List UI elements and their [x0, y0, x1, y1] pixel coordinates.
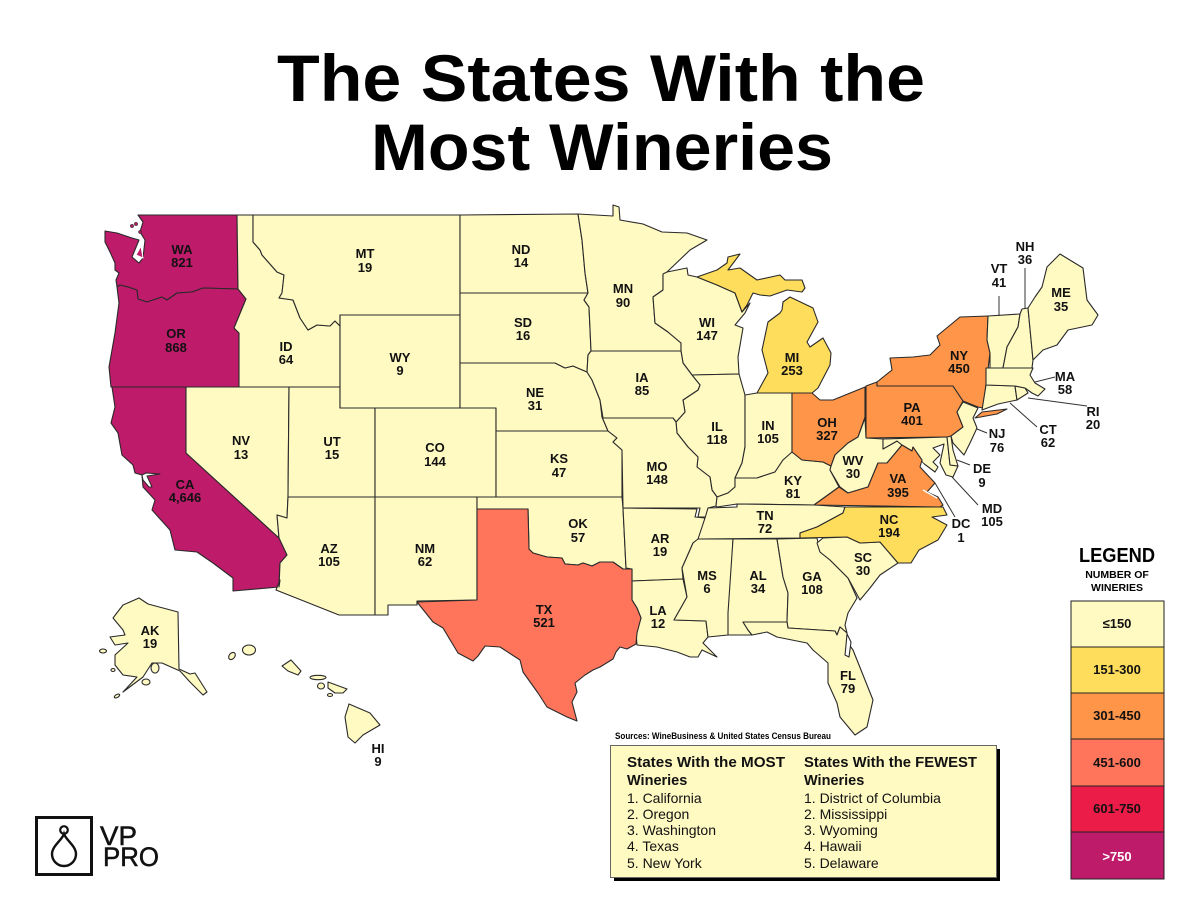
label: OR: OR: [166, 326, 186, 341]
legend scale: 451-600: [1093, 755, 1141, 770]
label: IA: 85: [635, 383, 649, 398]
label: OK: 57: [571, 530, 585, 545]
label: KY: 81: [786, 486, 800, 501]
state: New Hampshire: [1003, 308, 1033, 368]
label: ME: ME: [1051, 285, 1071, 300]
state: Iowa: [587, 351, 700, 422]
state: Minnesota: [578, 205, 707, 351]
state: Ohio: [792, 387, 865, 466]
label: NH: NH: [1016, 239, 1034, 254]
label: MD: 105: [981, 514, 1003, 529]
label: TN: 72: [758, 521, 772, 536]
label: PA: PA: [903, 400, 921, 415]
label: ME: 35: [1054, 299, 1068, 314]
label: AK: AK: [141, 623, 159, 638]
state: Nebraska: [460, 363, 608, 431]
legend scale: [1071, 601, 1164, 879]
label: AL: AL: [749, 568, 767, 583]
label: AK: 19: [143, 636, 157, 651]
column: fewest wineries: 4. Hawaii: [804, 838, 862, 854]
label: CA: 4,646: [169, 490, 201, 505]
label: MT: 19: [358, 260, 372, 275]
state: Alaska: [110, 598, 207, 695]
state: Montana: [253, 215, 460, 330]
column: most wineries: 3. Washington: [627, 822, 716, 838]
label: MI: MI: [785, 350, 799, 365]
leader lines for small states: [935, 268, 1087, 517]
column: most wineries: States With the MOST: [627, 755, 785, 771]
state: Utah: [288, 387, 375, 497]
label: MO: 148: [646, 472, 668, 487]
label: VA: VA: [889, 471, 907, 486]
label: NJ: 76: [990, 440, 1004, 455]
label: DE: DE: [973, 461, 991, 476]
rankings panel: [610, 746, 1000, 881]
state: Vermont: [987, 314, 1020, 368]
label: HI: 9: [374, 754, 382, 769]
label: IN: 105: [757, 431, 779, 446]
state: Washington, Puget Sound peninsula: [136, 246, 143, 258]
label: AR: AR: [651, 531, 669, 546]
state: Alaska islands: [100, 649, 159, 699]
state: Wisconsin: [653, 268, 750, 375]
label: KS: 47: [552, 465, 566, 480]
sources note: Sources: WineBusiness & United States Census Bureau: [615, 731, 831, 741]
state: South Dakota: [460, 293, 591, 372]
label: WV: WV: [843, 453, 863, 468]
title: [277, 41, 925, 184]
logo wordmark: VP: [100, 821, 137, 851]
label: OH: 327: [816, 428, 838, 443]
label: FL: 79: [841, 681, 855, 696]
logo: VP PRO: [36, 818, 159, 874]
legend subheading: WINERIES: [1091, 582, 1143, 594]
state: Hawaii: [227, 645, 380, 743]
column: most wineries: Wineries: [627, 773, 687, 789]
label: MS: MS: [697, 568, 717, 583]
state value labels: [141, 239, 1100, 769]
column: fewest wineries: [804, 755, 977, 871]
label: WI: WI: [699, 315, 715, 330]
legend scale: 601-750: [1093, 801, 1141, 816]
label: CT: CT: [1039, 422, 1057, 437]
label: SC: SC: [854, 550, 872, 565]
panel shadow: [614, 749, 1000, 881]
state: Michigan upper peninsula: [697, 254, 805, 312]
state: Florida: [743, 622, 873, 735]
label: MO: MO: [647, 459, 667, 474]
state: Indiana: [735, 393, 792, 478]
label: NY: NY: [950, 348, 968, 363]
state: Kentucky: [716, 452, 839, 507]
column: most wineries: 4. Texas: [627, 838, 679, 854]
label: SC: 30: [856, 563, 870, 578]
label: SD: 16: [516, 328, 530, 343]
label: ND: ND: [512, 242, 530, 257]
column: most wineries: 2. Oregon: [627, 806, 689, 822]
label: AZ: 105: [318, 554, 340, 569]
state: Delaware: [947, 436, 958, 466]
label: PA: 401: [901, 413, 923, 428]
label: FL: FL: [840, 668, 856, 683]
state: Michigan lower peninsula: [757, 297, 831, 393]
legend subheading: NUMBER OF: [1085, 569, 1149, 581]
state: Arkansas: [623, 508, 705, 581]
label: NV: NV: [232, 433, 250, 448]
label: WY: 9: [396, 363, 404, 378]
label: NC: NC: [880, 512, 898, 527]
label: UT: 15: [325, 447, 339, 462]
feature: Virginia tidal inlets: [922, 463, 937, 498]
label: WA: WA: [172, 242, 192, 257]
label: LA: 12: [651, 616, 665, 631]
state: Illinois: [676, 374, 745, 497]
column: most wineries: 5. New York: [627, 855, 703, 871]
state: North Carolina: [800, 507, 947, 563]
label: KY: KY: [784, 473, 802, 488]
state: Wyoming: [340, 315, 460, 408]
state: Nevada: [186, 387, 289, 538]
state: Tennessee: [698, 504, 845, 539]
title: The States With the: [277, 41, 925, 115]
label: WY: WY: [390, 350, 410, 365]
state: Missouri: [602, 417, 717, 517]
label: MA: 58: [1058, 382, 1072, 397]
label: TX: TX: [536, 602, 552, 617]
label: IA: IA: [636, 370, 648, 385]
column: fewest wineries: 1. District of Columbia: [804, 790, 941, 806]
legend scale: >750: [1102, 849, 1132, 864]
state: New York, Long Island: [975, 409, 1007, 418]
state: Colorado: [375, 408, 496, 497]
state: Georgia: [777, 538, 857, 635]
label: NE: 31: [528, 398, 542, 413]
column: most wineries: 1. California: [627, 790, 702, 806]
state: Alabama: [728, 539, 788, 635]
label: VT: 41: [992, 275, 1006, 290]
state: North Dakota: [460, 214, 588, 293]
label: CO: 144: [424, 454, 447, 469]
state: West Virginia: [830, 418, 902, 493]
label: NV: 13: [234, 447, 248, 462]
state: Oregon: [109, 285, 246, 387]
state: Kansas: [496, 431, 622, 497]
state: Pennsylvania: [866, 382, 963, 438]
logo mark: [36, 818, 92, 874]
label: CT: 62: [1041, 435, 1055, 450]
feature: St. Johns river in Florida: [845, 634, 851, 657]
label: WA: 821: [171, 255, 193, 270]
label: GA: GA: [802, 569, 822, 584]
legend heading: LEGEND: [1079, 545, 1155, 567]
state: Texas: [417, 509, 641, 721]
state: New Jersey: [951, 402, 978, 455]
state: Rhode Island: [1015, 386, 1028, 400]
label: DC: DC: [952, 516, 970, 531]
logo wordmark: [100, 821, 159, 872]
legend scale: ≤150: [1103, 616, 1131, 631]
label: RI: RI: [1086, 404, 1100, 419]
state: South Carolina: [817, 537, 898, 600]
column: fewest wineries: States With the FEWEST: [804, 755, 977, 771]
label: MA: MA: [1055, 369, 1075, 384]
state: Maine: [1028, 254, 1098, 360]
label: MS: 6: [703, 581, 711, 596]
label: MN: 90: [616, 295, 630, 310]
panel background: [610, 746, 996, 878]
label: RI: 20: [1086, 417, 1100, 432]
label: NE: NE: [526, 385, 544, 400]
label: CA: CA: [176, 477, 194, 492]
label: ID: 64: [279, 352, 294, 367]
state: Washington: [105, 215, 238, 302]
label: AZ: AZ: [320, 541, 338, 556]
state: New Mexico: [375, 497, 477, 615]
label: MI: 253: [781, 363, 803, 378]
label: OH: OH: [817, 415, 837, 430]
state: Washington, San Juan islands: [130, 222, 141, 233]
state: Virginia: [814, 445, 943, 507]
feature: San Francisco Bay: [142, 473, 160, 487]
state: Arizona: [276, 497, 375, 615]
legend scale: 151-300: [1093, 662, 1141, 677]
label: SD: SD: [514, 315, 532, 330]
column: fewest wineries: Wineries: [804, 773, 864, 789]
label: NM: 62: [418, 554, 432, 569]
label: IN: IN: [762, 418, 774, 433]
state: Idaho: [234, 215, 340, 387]
label: UT: UT: [323, 434, 341, 449]
label: NM: NM: [415, 541, 435, 556]
label: ND: 14: [514, 255, 529, 270]
legend: [1071, 545, 1164, 879]
state: Louisiana: [632, 579, 717, 657]
state: Oklahoma: [477, 497, 632, 569]
label: WV: 30: [846, 466, 860, 481]
label: MD: MD: [982, 501, 1002, 516]
label: AR: 19: [653, 544, 667, 559]
label: HI: HI: [372, 741, 384, 756]
label: KS: KS: [550, 451, 568, 466]
column: fewest wineries: 3. Wyoming: [804, 822, 878, 838]
label: TX: 521: [533, 615, 555, 630]
label: OK: OK: [568, 516, 588, 531]
label: DE: 9: [978, 475, 986, 490]
state: Connecticut: [982, 385, 1017, 410]
label: IL: 118: [707, 432, 727, 447]
label: DC: 1: [957, 530, 965, 545]
label: WI: 147: [696, 328, 718, 343]
label: NC: 194: [878, 525, 901, 540]
title: Most Wineries: [371, 110, 833, 184]
logo wordmark: PRO: [103, 842, 159, 872]
legend scale: 301-450: [1093, 708, 1141, 723]
label: NJ: NJ: [989, 426, 1005, 441]
label: OR: 868: [165, 340, 187, 355]
column: fewest wineries: 5. Delaware: [804, 855, 879, 871]
state: New York: [877, 316, 990, 408]
state: California: [111, 387, 287, 591]
label: IL: IL: [711, 419, 723, 434]
label: AL: 34: [751, 581, 766, 596]
label: VA: 395: [887, 485, 909, 500]
label: NH: 36: [1018, 252, 1032, 267]
label: VT: VT: [991, 261, 1007, 276]
label: ID: ID: [280, 339, 292, 354]
label: MT: MT: [356, 246, 374, 261]
map of US states: [100, 205, 1098, 743]
state: Mississippi: [674, 539, 733, 637]
column: most wineries: [627, 755, 785, 871]
label: LA: LA: [649, 603, 667, 618]
label: CO: CO: [425, 440, 445, 455]
label: TN: TN: [756, 508, 774, 523]
label: GA: 108: [801, 582, 823, 597]
column: fewest wineries: 2. Mississippi: [804, 806, 887, 822]
state: Maryland: [883, 437, 958, 477]
label: MN: MN: [613, 281, 633, 296]
state: Massachusetts: [986, 368, 1045, 396]
label: NY: 450: [948, 361, 970, 376]
